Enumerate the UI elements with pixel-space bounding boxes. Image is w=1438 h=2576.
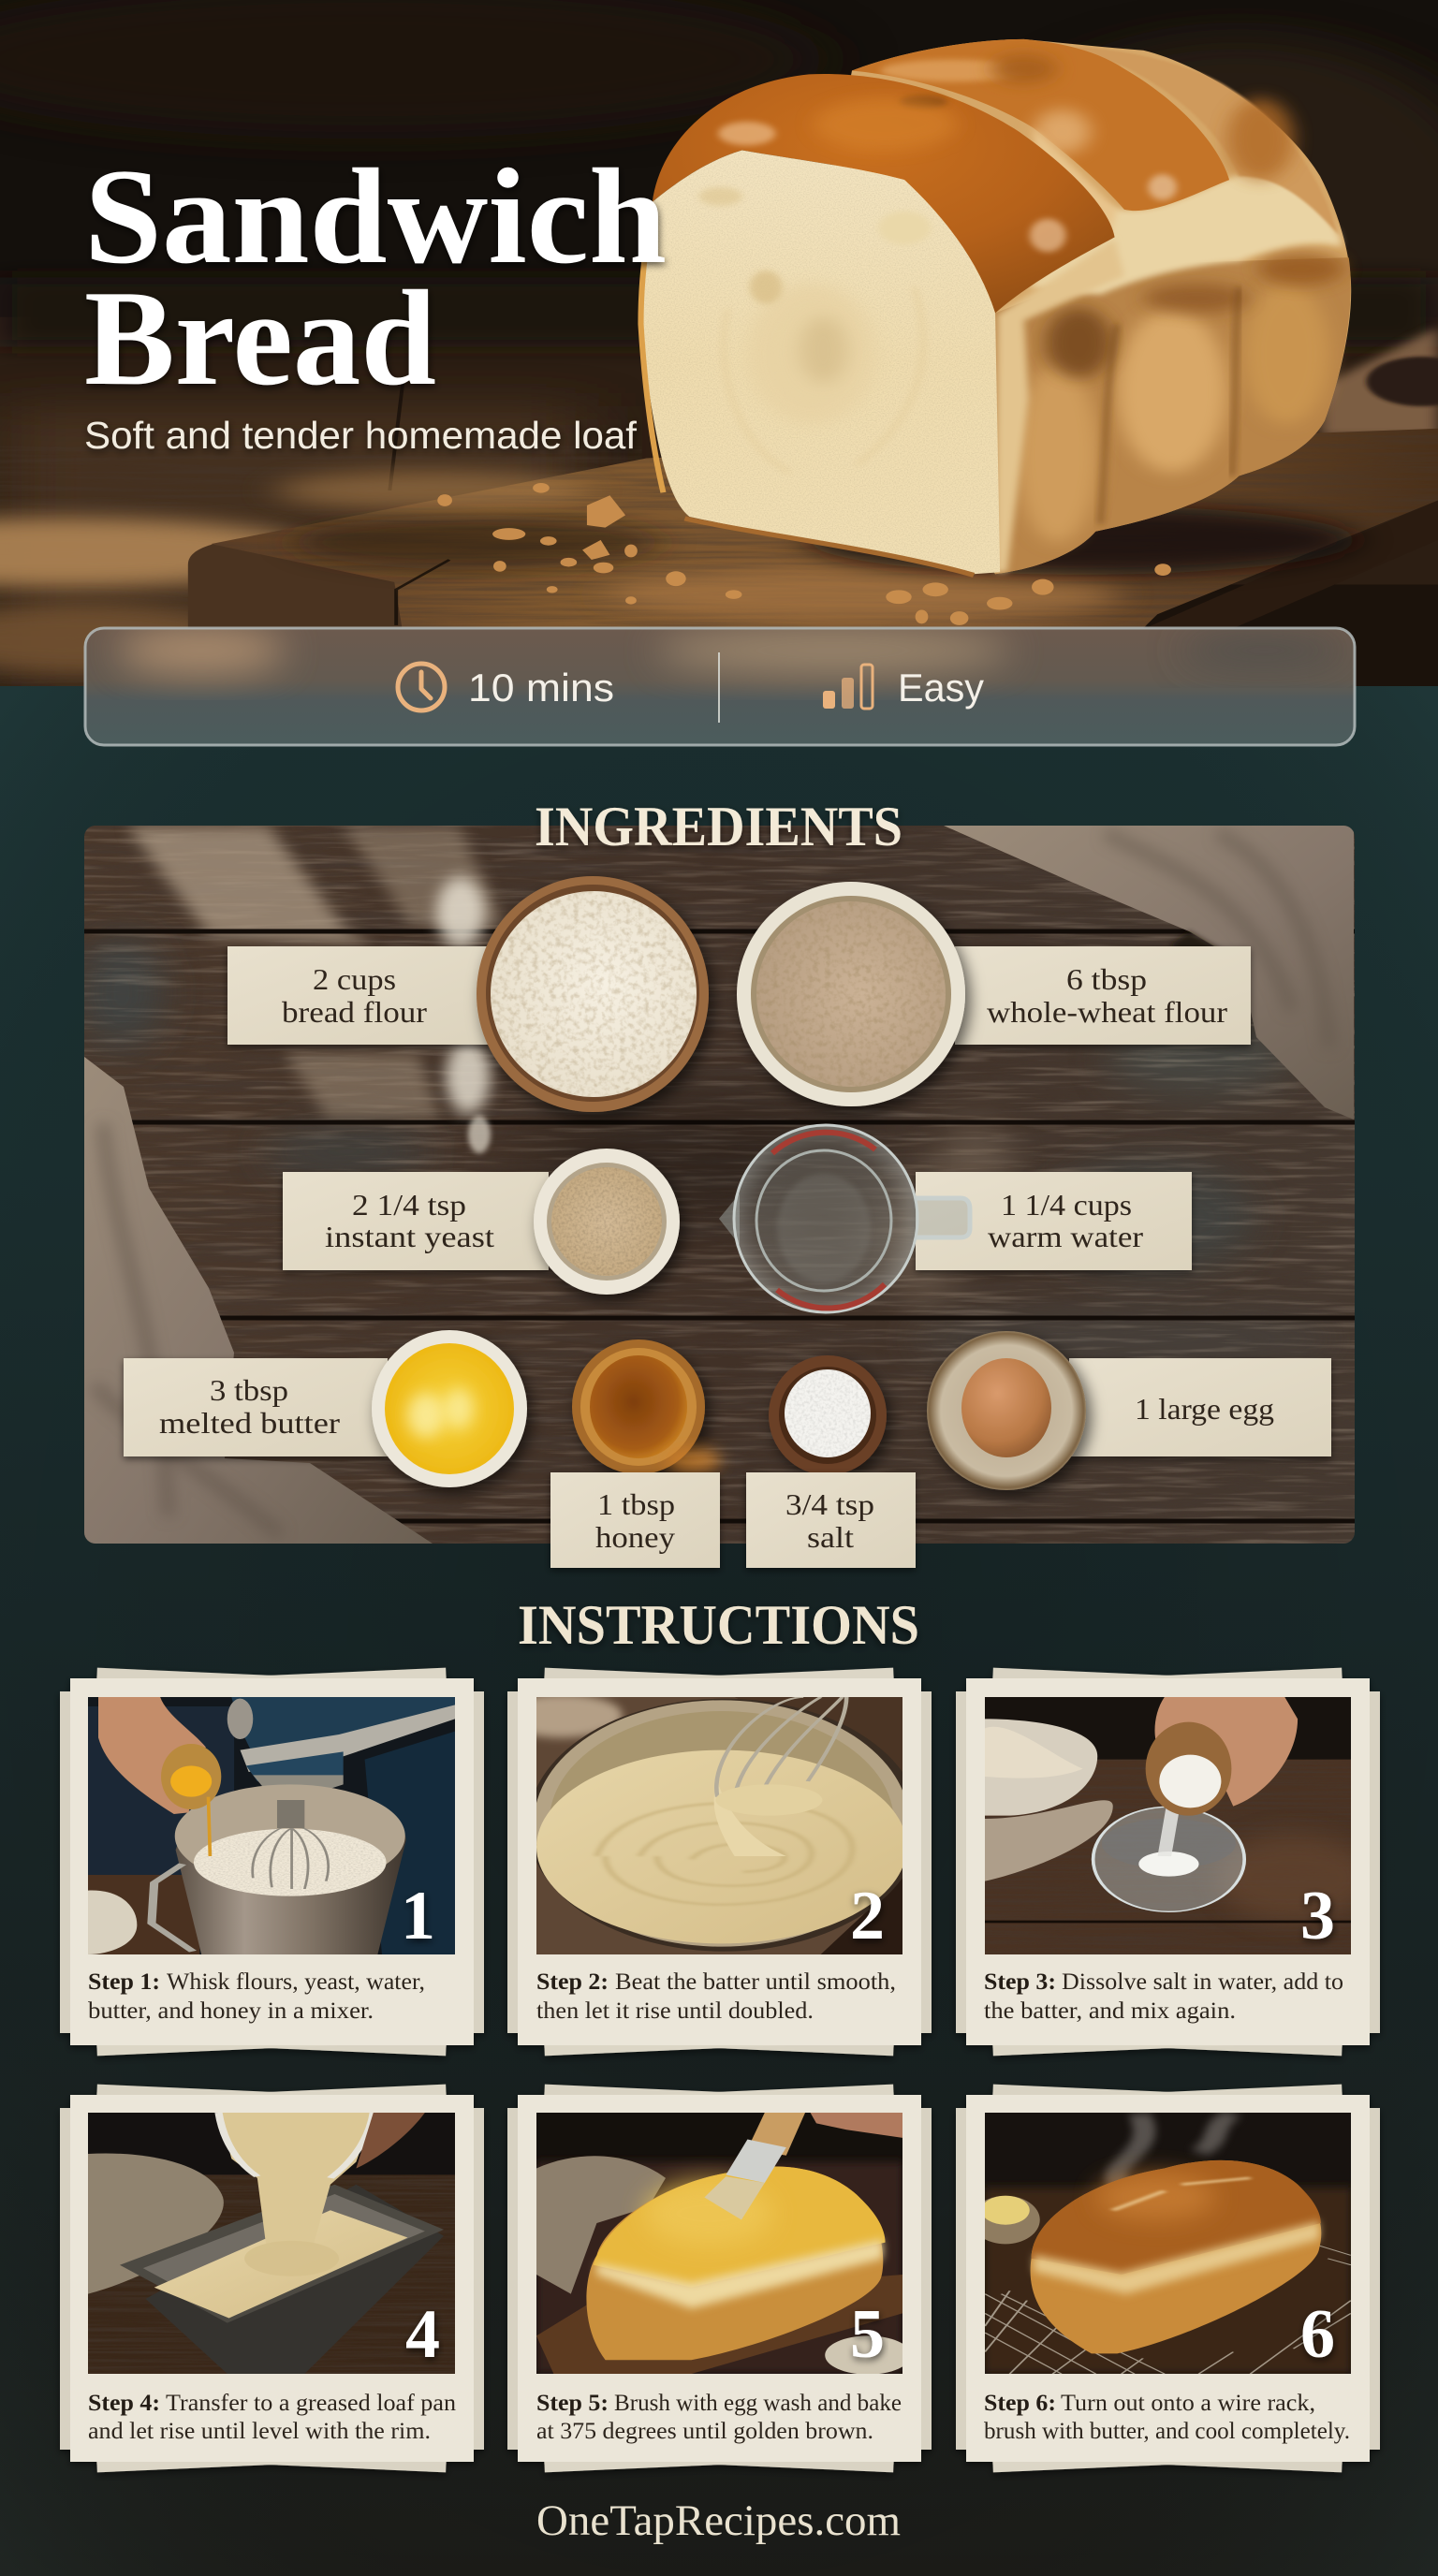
time label: 10 mins (468, 666, 614, 710)
measuring cup: warm water (719, 1125, 970, 1312)
bowl: bread flour (477, 876, 709, 1112)
step 6 text (984, 2391, 1350, 2444)
label: warm water: 1 1/4 cups (1001, 1188, 1132, 1222)
subtitle: Soft and tender homemade loaf (84, 414, 638, 457)
label: bread flour (227, 946, 490, 1045)
step 4 text: Transfer to a greased loaf pan (166, 2391, 457, 2416)
step 6 text: brush with butter, and cool completely. (984, 2419, 1350, 2444)
loaf of bread (638, 39, 1353, 578)
step number 6: 6 (1300, 2296, 1335, 2373)
step 3 text: the batter, and mix again. (984, 1998, 1236, 2024)
heading: instructions: INSTRUCTIONS (518, 1594, 919, 1656)
panel: ingredients table (80, 826, 1355, 1544)
step 5 text: Brush with egg wash and bake (614, 2391, 902, 2416)
step 2 text: Beat the batter until smooth, (615, 1969, 896, 1995)
label: whole-wheat flour: whole-wheat flour (987, 995, 1227, 1029)
bowl: salt (769, 1355, 887, 1475)
cloth: top right (944, 826, 1354, 1120)
photo: brushing egg wash (536, 2113, 902, 2374)
label: instant yeast: 2 1/4 tsp (352, 1188, 466, 1222)
step number 4: 4 (405, 2296, 440, 2373)
icon: difficulty bars (823, 665, 873, 709)
step card 1 (60, 1668, 484, 2056)
step card 3 (956, 1668, 1380, 2056)
step 1 text: butter, and honey in a mixer. (88, 1998, 374, 2024)
label: whole-wheat flour: 6 tbsp (1066, 962, 1147, 996)
label: warm water: warm water (988, 1220, 1143, 1253)
background vignette (0, 686, 1438, 2576)
label: melted butter (124, 1358, 388, 1456)
jar: honey (572, 1339, 705, 1474)
photo: dissolving salt (985, 1697, 1351, 1954)
title: Sandwich (84, 140, 667, 292)
label: whole-wheat flour (955, 946, 1251, 1045)
hero photo: table and cutting board (0, 0, 1438, 686)
step 5 text: at 375 degrees until golden brown. (536, 2419, 873, 2444)
label: warm water (916, 1172, 1192, 1270)
bowl: egg (927, 1331, 1086, 1490)
step 3 text: Step 3: (984, 1969, 1056, 1995)
photo: pouring batter into pan (88, 2113, 455, 2374)
step 1 text: Step 1: (88, 1969, 160, 1995)
step 2 text: then let it rise until doubled. (536, 1998, 814, 2024)
label: melted butter: 3 tbsp (210, 1373, 288, 1407)
step number 5: 5 (850, 2296, 885, 2373)
label: instant yeast (283, 1172, 549, 1270)
difficulty label: Easy (898, 666, 984, 710)
bowl: melted butter (372, 1330, 527, 1487)
photo: loaf cooling on rack (985, 2113, 1351, 2374)
step 4 text (88, 2391, 457, 2444)
label: salt: 3/4 tsp (785, 1487, 874, 1521)
label: honey: honey (595, 1520, 675, 1554)
step 5 text (536, 2391, 902, 2444)
label: salt: salt (807, 1520, 854, 1554)
step 6 text: Step 6: (984, 2391, 1056, 2416)
step number 2: 2 (850, 1878, 885, 1954)
heading: ingredients: INGREDIENTS (535, 796, 902, 857)
photo: stand mixer (88, 1697, 455, 1954)
label: salt (746, 1472, 916, 1568)
step 1 text: Whisk flours, yeast, water, (167, 1969, 425, 1995)
label: honey (550, 1472, 720, 1568)
step 2 text: Step 2: (536, 1969, 609, 1995)
step 1 text (88, 1969, 425, 2024)
step 4 text: and let rise until level with the rim. (88, 2419, 431, 2444)
footer website: OneTapRecipes.com (536, 2496, 901, 2545)
step card 6 (956, 2085, 1380, 2472)
label: honey: 1 tbsp (597, 1487, 675, 1521)
label: egg: 1 large egg (1135, 1392, 1274, 1426)
title (84, 140, 667, 414)
step 2 text (536, 1969, 896, 2024)
photo: batter and whisk (536, 1697, 902, 1954)
step number 1: 1 (401, 1878, 435, 1954)
info bar (85, 628, 1355, 745)
bread crumbs (437, 483, 1171, 625)
step card 5 (507, 2085, 932, 2472)
label: melted butter: melted butter (159, 1406, 340, 1440)
step 6 text: Turn out onto a wire rack, (1061, 2391, 1315, 2416)
step number 3: 3 (1300, 1878, 1335, 1954)
step 3 text (984, 1969, 1343, 2024)
cutting board (188, 429, 1438, 654)
bowl: instant yeast (534, 1149, 680, 1295)
icon: clock (398, 664, 445, 710)
cloth: bottom left (84, 1057, 433, 1544)
title: Bread (84, 262, 436, 414)
bowl: whole-wheat flour (737, 882, 965, 1106)
divider (718, 652, 720, 723)
step 4 text: Step 4: (88, 2391, 160, 2416)
step card 4 (60, 2085, 484, 2472)
label: bread flour: bread flour (282, 995, 427, 1029)
label: instant yeast: instant yeast (325, 1220, 494, 1253)
step 3 text: Dissolve salt in water, add to (1062, 1969, 1343, 1995)
label: bread flour: 2 cups (313, 962, 396, 996)
step 5 text: Step 5: (536, 2391, 609, 2416)
step card 2 (502, 1668, 932, 2056)
label: egg (1069, 1358, 1331, 1456)
